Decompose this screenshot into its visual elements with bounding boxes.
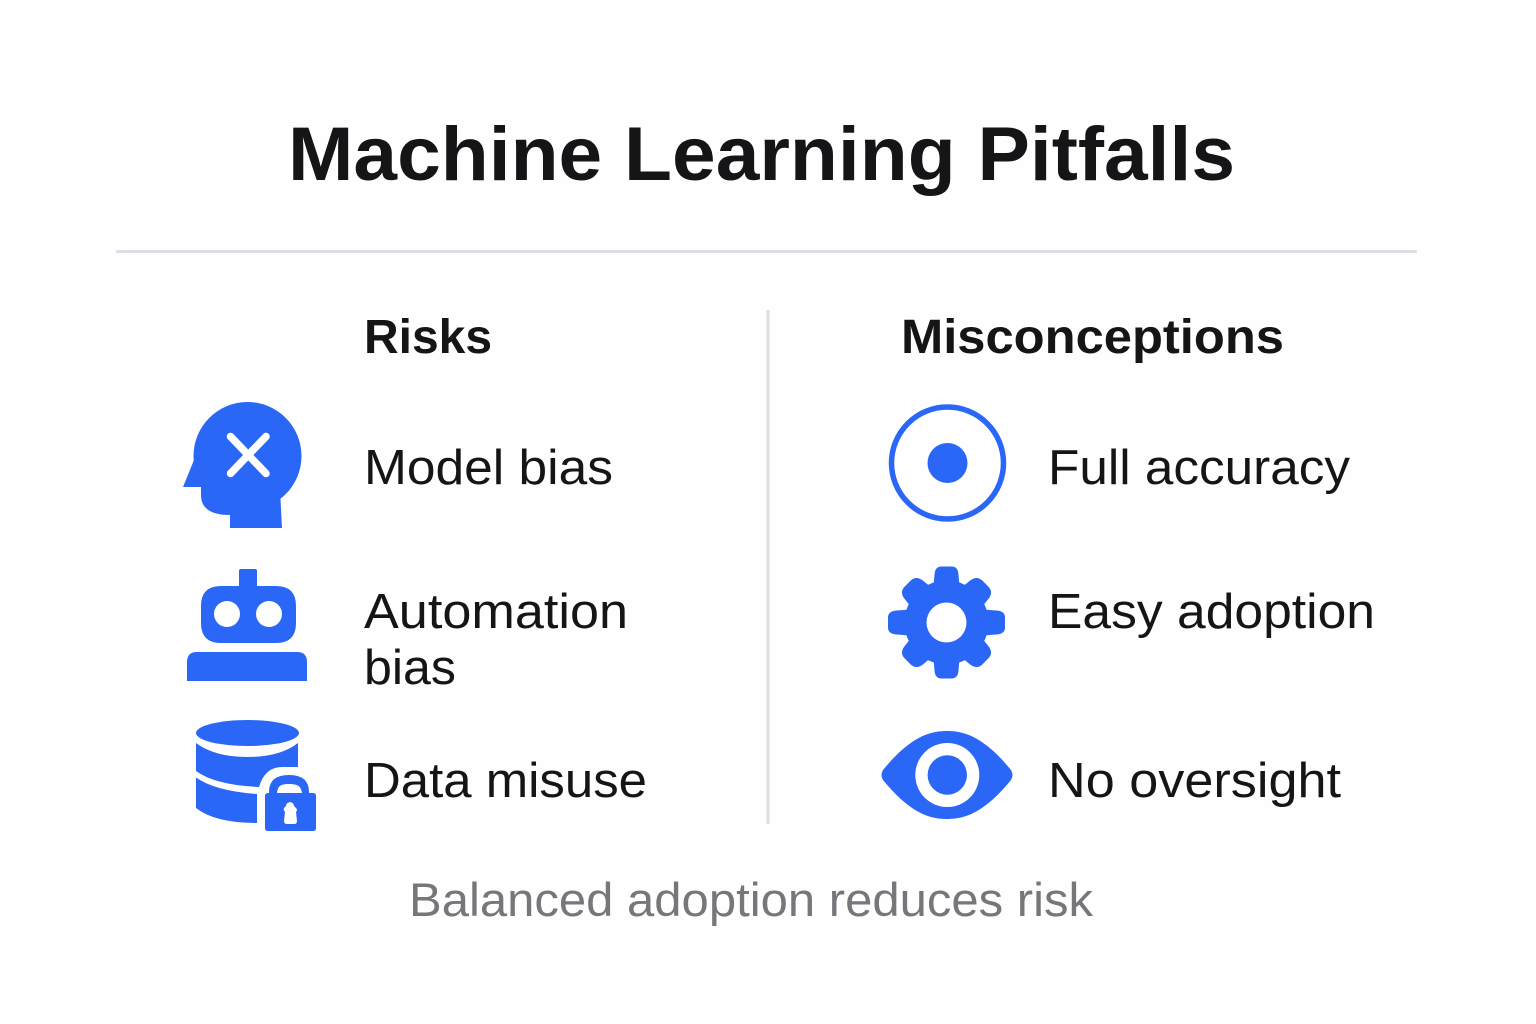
icon: head with X: [183, 402, 302, 528]
label: model bias: Model bias: [364, 441, 613, 495]
icon: gear: [888, 566, 1005, 678]
icon: robot: [187, 569, 307, 681]
heading: risks: Risks: [364, 311, 492, 364]
icon: database with lock: [196, 720, 316, 831]
label: automation bias: bias: [364, 641, 456, 695]
panel: misconceptions: [882, 311, 1375, 819]
panel: risks: [183, 311, 647, 831]
label: data misuse: Data misuse: [364, 754, 647, 808]
label: automation bias: Automation: [364, 585, 628, 639]
footer caption: Balanced adoption reduces risk: [409, 873, 1094, 926]
title: Machine Learning Pitfalls: [288, 112, 1235, 197]
icon: target: [892, 407, 1004, 519]
label: easy adoption: Easy adoption: [1048, 585, 1375, 639]
heading: misconceptions: Misconceptions: [901, 311, 1284, 364]
icon: eye: [882, 731, 1012, 819]
label: automation bias: [364, 585, 628, 695]
label: no oversight: No oversight: [1048, 754, 1341, 808]
label: full accuracy: Full accuracy: [1048, 441, 1351, 495]
